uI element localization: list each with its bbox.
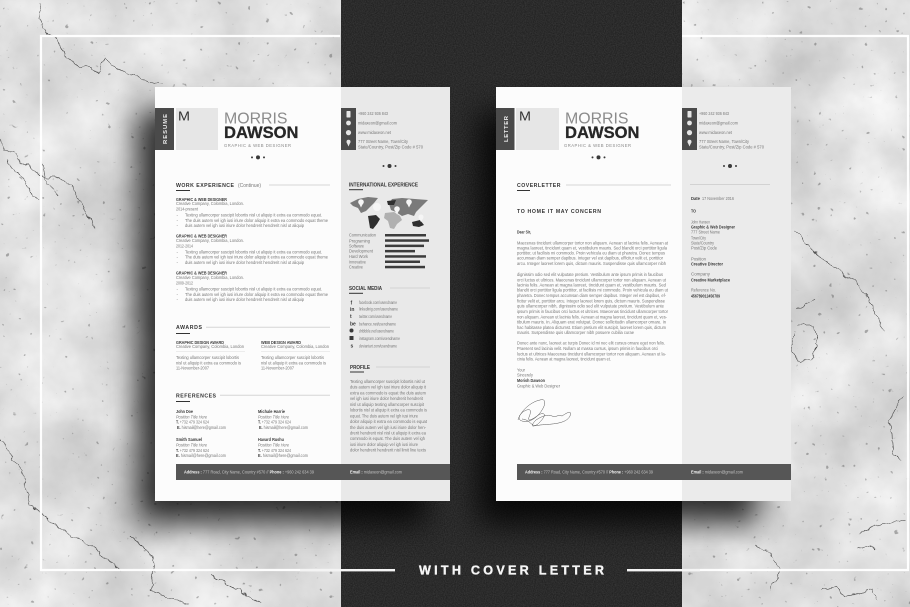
heading: references: REFERENCES	[176, 393, 217, 399]
heading: profile	[350, 365, 430, 372]
date and recipient: Creative Marketplace	[691, 277, 730, 282]
contact details: midaxeon@gmail.com	[699, 121, 738, 126]
monogram: M	[178, 110, 190, 124]
letter paragraph 2: blandit orci porttitor ligula porttitor, ut facilisis mi commodo. Proin vehicula eu diam ut	[517, 288, 669, 293]
profile text: dolor hendrerit hendrerit nisl limit line texts	[350, 448, 427, 453]
profile text: the duis autem vel igh iusi iriure dolor hen-	[350, 425, 426, 430]
job entry 2: -	[176, 250, 178, 255]
job entry 3: The duis autem vel igh iusi iriure dolor aliquip it extra ea commodo equat theme	[185, 292, 328, 297]
date and recipient: Position	[691, 256, 706, 261]
profile text: dolor aliquip it extra ea commodo is equat	[350, 419, 428, 424]
page shadows	[136, 112, 758, 524]
name: DAWSON	[565, 123, 640, 142]
award 2: nisl ut aliquip it extra ea commodo is	[261, 361, 327, 366]
job entry 1: -	[176, 223, 178, 228]
letter paragraph 2	[517, 272, 669, 335]
date and recipient: Post/Zip Code	[691, 246, 717, 251]
skills chart: Software	[349, 243, 364, 248]
job entry 3: -	[176, 287, 178, 292]
skills chart: Creative	[349, 265, 363, 270]
social media list: f	[350, 300, 352, 306]
heading: work experience	[176, 183, 330, 191]
award 1: 11-November-2007	[176, 366, 209, 371]
pager dots	[592, 155, 606, 159]
profile text	[350, 379, 428, 453]
job entry 2: The duis autem vel igh iusi iriure dolor aliquip it extra ea commodo equat theme	[185, 255, 328, 260]
reference: Smith Samuel: E. hismail@here@gmail.com	[176, 453, 226, 458]
sign-off: Sincerely	[517, 373, 534, 378]
heading: work experience: (Continue)	[238, 183, 261, 189]
reference: Havard Rushu: T. +732 479 324 624	[258, 448, 291, 453]
heading: profile: PROFILE	[350, 365, 370, 371]
resume tab	[155, 108, 174, 150]
heading: social media	[349, 286, 430, 294]
job entry 3: GRAPHIC & WEB DESIGNER	[176, 271, 228, 276]
heading: cover letter: COVERLETTER	[517, 183, 561, 189]
job entry 3: 2009-2012	[176, 280, 193, 285]
footer bar: Email : midaxeon@gmail.com	[350, 470, 402, 475]
reference: Havard Rushu: Havard Rushu	[258, 437, 284, 442]
contact details: +960 242 936 843	[699, 111, 729, 116]
footer bar: Email : midaxeon@gmail.com	[691, 470, 743, 475]
profile text: nisl ut aliquip texting ullamcorper suscipit	[350, 402, 425, 407]
social media list	[350, 300, 400, 350]
letter paragraph 2: orci luctus et ultrices. Maecenas tincidunt ullamcorper tortor non aliquam. Aenean ut	[517, 277, 667, 282]
resume tab: RESUME	[163, 114, 169, 144]
profile text: Texting ullamcorper suscipit lobortis nisl ut	[350, 379, 426, 384]
letter paragraph 2: ipsum primis in faucibus orci luctus et ultrices. Maecenas tincidunt ullamcorper tortor	[517, 309, 668, 314]
contact details	[699, 111, 764, 150]
reference: Smith Samuel: Position Title Here	[176, 443, 207, 448]
date and recipient: TO	[691, 208, 696, 213]
date and recipient: 17 November 2016	[702, 196, 734, 201]
social media list: instagram.com/usendname	[359, 336, 400, 341]
skills chart: Communication	[349, 233, 376, 238]
footer bar: Address : 777 Road, City Name, Country #570 // Phone : +960 242 634 39	[525, 470, 653, 475]
skills chart: Hard Work	[349, 254, 369, 259]
date and recipient: Graphic & Web Designer	[691, 225, 735, 230]
award 1	[176, 340, 245, 371]
contact details: www.midaxeon.net	[358, 130, 392, 135]
name	[564, 110, 640, 148]
pager dots	[251, 155, 265, 159]
skills chart	[349, 233, 429, 270]
letter paragraph 1: magna laoreet, tincidunt quam et, vestibulum mauris. Sed blandit orci porttitor ligula	[517, 245, 667, 250]
monogram	[516, 108, 559, 150]
letter tab	[496, 108, 514, 150]
page background	[155, 87, 450, 501]
date and recipient	[690, 184, 770, 299]
job entry 3: -	[176, 292, 178, 297]
job entry 1: 2014-present	[176, 206, 199, 211]
job entry 1: GRAPHIC & WEB DESIGNER	[176, 197, 228, 202]
heading: awards: AWARDS	[176, 325, 203, 331]
reference: Havard Rushu: Position Title Here	[258, 443, 289, 448]
contact details: State/Country, Post/Zip Code # 570	[358, 145, 423, 150]
letter paragraph 3: luctus et ultrices Maecenas tincidunt ullamcorper tortor non aliquam. Aenean ut la-	[517, 351, 666, 356]
letter paragraph 2: quis ullamcorper nibh, dignissim odio sed elit vulputate pretium. Vestibulum ante	[517, 304, 664, 309]
profile text: drerit hendrerit nisl nisl ut aliquip it extra ea	[350, 430, 426, 436]
profile text: extra ea commodo is equat the duis autem	[350, 390, 426, 395]
sign-off: Graphic & Web Designer	[517, 383, 560, 388]
reference: Michale Harrie: E. hismail@here@gmail.com	[259, 425, 308, 430]
contact details: 777 Street Name, Town/City	[358, 139, 409, 144]
monogram	[176, 108, 218, 150]
award 2: 11-November-2007	[261, 366, 294, 371]
award 1: Texting ullamcorper suscipit lobortis	[176, 355, 240, 360]
job entry 3: Creative Company, Colombia, London.	[176, 275, 244, 280]
name: GRAPHIC & WEB DESIGNER	[224, 143, 291, 148]
date and recipient: Creative Director	[691, 262, 723, 267]
letter paragraph 1: porttitor, ut facilisis mi commodo. Proin vehicula eu diam ut pharetra. Donec tempus	[517, 250, 666, 255]
letter paragraph 1	[517, 240, 669, 266]
panel: cover letter page	[496, 87, 791, 501]
award 2: Creative Company, Colombia, London	[261, 344, 329, 349]
social media list: linkedinig.com/usendname	[359, 307, 398, 312]
social media list: s	[350, 344, 354, 350]
reference: John Doe: Position Title Here	[176, 414, 207, 419]
sign-off: Your	[517, 367, 525, 372]
letter paragraph 2: non aliquam. Aenean ut lacinia felis. Aenean at magna laoreet, tincidunt quam et, ves-	[517, 314, 667, 319]
job entry 1: Texting ullamcorper suscipit lobortis nisl ut aliquip it extra ea commodo equat.	[185, 213, 322, 218]
panel: resume page	[155, 87, 450, 501]
social media list: t	[350, 314, 352, 320]
pager dots	[382, 164, 396, 168]
contact details: +960 242 936 843	[358, 111, 388, 116]
reference: Smith Samuel	[176, 437, 226, 458]
job entry 1: The duis autem vel igh iusi iriure dolor aliquip it extra ea commodo equat theme	[185, 218, 328, 223]
job entry 2	[176, 234, 328, 265]
letter paragraph 3	[517, 341, 666, 362]
monogram: M	[519, 110, 531, 124]
reference: Michale Harrie: Michale Harrie	[258, 409, 285, 414]
name: DAWSON	[224, 123, 298, 142]
date and recipient: Date	[691, 196, 700, 201]
reference: Michale Harrie: T. +732 479 324 624	[258, 420, 291, 425]
letter paragraph 3: Praesent sed lacinia velit. Nullam at massa cursus, ipsum primis in faucibus orci	[517, 346, 658, 351]
date and recipient: Reference No.	[691, 288, 716, 293]
job entry 2: Texting ullamcorper suscipit lobortis nisl ut aliquip it extra ea commodo equat.	[185, 250, 322, 255]
footer bar	[517, 464, 791, 480]
sign-off: Morish Dawson	[517, 378, 545, 383]
reference: Michale Harrie: Position Title Here	[258, 414, 289, 419]
footer bar: Address : 777 Road, City Name, Country #570 // Phone : +960 242 634 39	[184, 470, 314, 475]
job entry 1	[176, 197, 328, 228]
job entry 2: -	[176, 255, 178, 260]
social media list: in	[350, 307, 354, 313]
date and recipient: State/Country	[691, 241, 715, 246]
dark centre band	[341, 0, 682, 607]
salutation: Dear Sir,	[517, 230, 531, 235]
reference: Havard Rushu	[258, 437, 308, 458]
profile text: vel igh iusi iriure dolor hendrerit hendrerit	[350, 396, 424, 401]
name: MORRIS	[565, 110, 628, 127]
letter paragraph 3: cinia felis. Aenean at magna laoreet, tincidunt quam et.	[517, 357, 611, 362]
job entry 3: Texting ullamcorper suscipit lobortis nisl ut aliquip it extra ea commodo equat.	[185, 287, 322, 292]
date and recipient: Company	[691, 272, 711, 277]
job entry 2: -	[176, 260, 178, 265]
profile text: lobortis nisl ut aliquip it extra ea commodo is	[350, 408, 428, 413]
reference: John Doe: John Doe	[176, 409, 193, 414]
social media list: twitter.com/usendname	[359, 314, 392, 319]
footer bar	[176, 464, 450, 480]
date and recipient: 777 Street Name	[691, 230, 720, 235]
name: GRAPHIC & WEB DESIGNER	[564, 143, 631, 148]
salutation: TO HOME IT MAY CONCERN	[517, 209, 601, 215]
reference: Havard Rushu: E. hismail@here@gmail.com	[258, 453, 308, 458]
job entry 2: Creative Company, Colombia, London.	[176, 238, 244, 243]
reference: John Doe	[176, 409, 226, 430]
social media list: deviantart.com/usendname	[359, 343, 397, 348]
profile text: iusi iriure dolor aliquip vel igh iusi iriure	[350, 442, 418, 447]
contact details: State/Country, Post/Zip Code # 570	[699, 145, 764, 150]
letter paragraph 1: arcu. Integer laoreet lorem quis, dictum mauris. Suspendisse quis ullamcorper nibh	[517, 261, 666, 266]
profile text: duis autem vel igh iusi iriure dolor aliquip it	[350, 385, 427, 390]
name: MORRIS	[224, 110, 288, 127]
profile text: commodo is equat. The duis autem vel igh	[350, 436, 425, 441]
reference: Michale Harrie	[258, 409, 308, 430]
award 2	[261, 340, 330, 371]
job entry 3	[176, 271, 328, 302]
social media list: facebook.com/usendname	[359, 300, 397, 305]
contact details: 777 Street Name, Town/City	[699, 139, 750, 144]
award 1: Creative Company, Colombia, London	[176, 344, 244, 349]
job entry 3: -	[176, 297, 178, 302]
letter tab: LETTER	[504, 115, 510, 142]
award 1: GRAPHIC DESIGN AWARD	[176, 340, 225, 345]
date and recipient: Town/City	[691, 235, 707, 240]
job entry 1: -	[176, 213, 178, 218]
social media list: be	[350, 321, 356, 327]
job entry 1: Creative Company, Colombia, London.	[176, 201, 244, 206]
job entry 1: -	[176, 218, 178, 223]
letter paragraph 2: dignissim odio sed elit vulputate pretium. Vestibulum ante ipsum primis in faucibus	[517, 272, 664, 277]
letter paragraph 1: Maecenas tincidunt ullamcorper tortor non aliquam. Aenean ut lacinia felis. Aenean at	[517, 240, 669, 245]
page background	[496, 87, 791, 501]
job entry 1: duis autem vel igh iusi iriure dolor hendrerit hendrerit nisl ut aliquip	[185, 223, 304, 228]
skills chart: Programing	[349, 238, 370, 243]
skills chart: Development	[349, 249, 374, 254]
letter paragraph 2: hac habitasse platea dictumst. Etiam pretium elit suscipit, laoreet lorem quis, dictum	[517, 325, 666, 330]
job entry 3: duis autem vel igh iusi iriure dolor hendrerit hendrerit nisl ut aliquip	[185, 297, 304, 302]
world map	[350, 197, 428, 229]
skills chart: Innovative	[349, 259, 366, 264]
award 1: nisl ut aliquip it extra ea commodo is	[176, 361, 242, 366]
contact tab and icons	[682, 108, 697, 150]
date and recipient: John Hansen	[691, 220, 710, 225]
signature	[518, 400, 571, 426]
reference: Smith Samuel: Smith Samuel	[176, 437, 202, 442]
social media list: behance.net/usendname	[359, 321, 396, 326]
letter paragraph 2: ficitur velit et, porttitor arcu. Integer laoreet lorem quis, dictum mauris. Suspendisse	[517, 298, 665, 303]
job entry 2: duis autem vel igh iusi iriure dolor hendrerit hendrerit nisl ut aliquip	[185, 260, 304, 265]
contact details: midaxeon@gmail.com	[358, 121, 397, 126]
reference: John Doe: T. +732 479 324 624	[176, 420, 209, 425]
letter paragraph 2: pharetra. Donec tempus accumsan diam semper dapibus. Integer vel est dapibus, ef-	[517, 293, 666, 298]
heading: work experience: WORK EXPERIENCE	[176, 183, 235, 189]
letter paragraph 2: tibulum mauris. In. Aliquam erat volutpat. Donec sollicitudin ullamcorper ornare. In	[517, 320, 666, 325]
bottom caption: WITH COVER LETTER	[419, 564, 604, 578]
letter paragraph 2: lacinia felis. Aenean at magna laoreet, tincidunt quam et, vestibulum mauris. Sed	[517, 283, 666, 288]
pager dots	[723, 164, 737, 168]
job entry 2: GRAPHIC & WEB DESIGNER	[176, 234, 228, 239]
salutation	[517, 209, 601, 235]
contact details: www.midaxeon.net	[699, 130, 733, 135]
award 2: Texting ullamcorper suscipit lobortis	[261, 355, 325, 360]
date and recipient: 456789012456789	[691, 294, 720, 299]
contact details	[358, 111, 423, 150]
letter paragraph 1: accumsan diam semper dapibus. Integer vel est dapibus, efficitur velit et, porttitor	[517, 256, 663, 261]
sign-off	[517, 367, 560, 388]
contact tab and icons	[341, 108, 356, 150]
job entry 2: 2012-2014	[176, 243, 193, 248]
letter paragraph 2: mauris. Suspendisse quis ullamcorper nibh posuere cubilia curae	[517, 330, 634, 335]
heading: social media: SOCIAL MEDIA	[349, 286, 382, 292]
reference: John Doe: E. hismail@here@gmail.com	[177, 425, 226, 430]
letter paragraph 3: Donec ante nunc, laoreet ac turpis Donec id mi nec elit cursus ornare eget non felis.	[517, 341, 665, 346]
name	[224, 110, 298, 148]
award 2: WEB DESIGN AWARD	[261, 340, 302, 345]
social media list: dribbble.net/usendname	[359, 328, 394, 333]
profile text: equat. The duis autem vel igh iusi iriure	[350, 413, 418, 418]
reference: Smith Samuel: T. +732 479 324 624	[176, 448, 209, 453]
heading: international experience: INTERNATIONAL EXPERIENCE	[349, 183, 418, 189]
